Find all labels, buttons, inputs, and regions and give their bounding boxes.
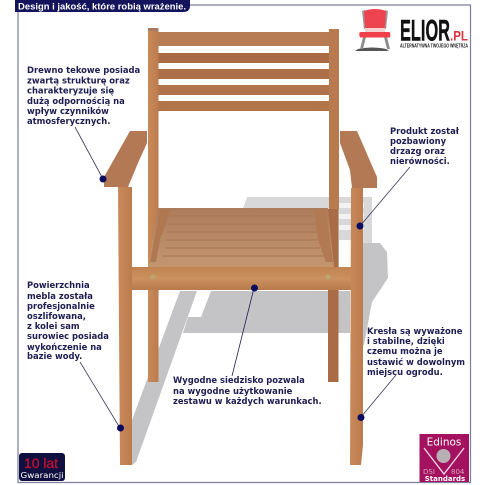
callout: wood structure: wpływ czynników [27, 106, 109, 116]
callout: no splinters: pozbawiony [390, 136, 447, 146]
callout: surface: mebla została [27, 291, 93, 301]
callout: surface [27, 280, 124, 432]
callout: no splinters: drzazg oraz [390, 146, 445, 156]
callout: surface: surowiec posiada [27, 331, 109, 341]
front right leg [350, 188, 363, 465]
title banner: Design i jakość, które robią wrażenie. [18, 2, 186, 12]
callout: surface: z kolei sam [27, 321, 80, 331]
badge: 10 years warranty [19, 453, 65, 481]
callout: seat: zestawu w każdych warunkach. [173, 396, 322, 406]
callout: surface: wykończenie na [27, 342, 102, 352]
badge: 10 years warranty: Gwarancji [20, 471, 64, 480]
badge: Edinos standards: Edinos [427, 436, 461, 448]
callout: seat: Wygodne siedzisko pozwala [173, 375, 305, 385]
right armrest [340, 131, 377, 188]
callout: stability: Kresła są wyważone [367, 326, 463, 336]
callout: seat: na wygodne użytkowanie [173, 386, 293, 396]
callout: wood structure: Drewno tekowe posiada [27, 65, 140, 75]
badge: Edinos standards: DSI [423, 468, 435, 476]
callout: wood structure: dużą odpornością na [27, 96, 125, 106]
callout: no splinters: Produkt został [390, 126, 460, 136]
callout: stability: i stabilne, dzięki [367, 336, 445, 346]
callout: wood structure: zwartą strukturę oraz [27, 76, 130, 86]
chair shadow [132, 197, 388, 465]
icon: red chair [355, 9, 390, 51]
badge: Edinos standards: 804 [451, 468, 465, 476]
logo: Elior [355, 9, 468, 51]
badge: Edinos standards: Standards [425, 475, 465, 483]
callout: stability: ustawić w dowolnym [367, 357, 465, 367]
callout: no splinters [356, 126, 460, 230]
left armrest [104, 131, 147, 187]
back slats [158, 32, 329, 111]
callout: wood structure: atmosferycznych. [27, 116, 110, 126]
callout: stability [358, 326, 465, 421]
callout: stability: czemu można je [367, 346, 443, 356]
callout: no splinters: nierówności. [390, 156, 450, 166]
callout: surface: bazie wody. [27, 351, 82, 361]
seat [148, 208, 334, 267]
callout: wood structure [27, 65, 140, 182]
callout: surface: oszlifowana, [27, 311, 86, 321]
callout: wood structure: charakteryzuje się [27, 86, 114, 96]
back posts and rear legs [148, 28, 339, 382]
front rail [130, 267, 351, 290]
callout: surface: Powierzchnia [27, 280, 90, 290]
badge: 10 years warranty: 10 lat [24, 455, 58, 471]
callout: stability: miejscu ogrodu. [367, 367, 443, 377]
chair [104, 28, 377, 465]
callout: surface: profesjonalnie [27, 301, 95, 311]
logo: Elior: .PL [450, 28, 468, 44]
front left leg [118, 187, 132, 465]
badge: Edinos standards [420, 434, 469, 483]
callout: seat [173, 284, 322, 406]
